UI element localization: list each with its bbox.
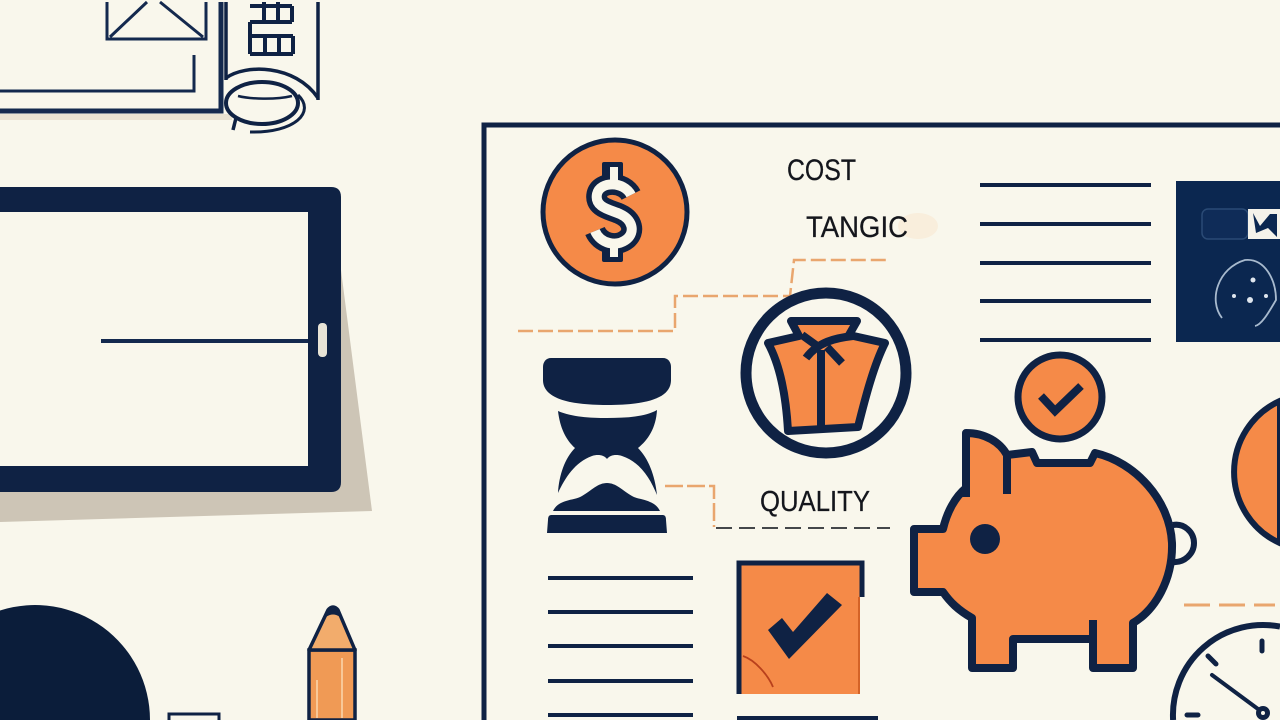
text lines, lower left: [548, 578, 693, 715]
small box, bottom: [169, 714, 219, 720]
heading: QUALITY: QUALITY: [760, 486, 870, 518]
icon: hourglass: [543, 358, 671, 533]
icon: envelope: [107, 2, 206, 39]
connector: dashed lines: [518, 260, 1275, 605]
icon: dollar coin: [543, 140, 687, 284]
heading: COST: COST: [787, 154, 856, 187]
pig eye: [970, 524, 1000, 554]
icon: pencil: [309, 607, 355, 720]
dark image tile: [1176, 181, 1280, 342]
text lines, upper right: [980, 185, 1151, 340]
faint glow behind label: [898, 213, 938, 239]
icon: check coin: [1018, 355, 1102, 439]
icon: clock: [1173, 625, 1280, 720]
icon: piggy bank: [914, 433, 1194, 668]
main panel frame: [484, 125, 1280, 720]
icon: orange circle, right edge: [1234, 401, 1280, 543]
pig tail: [1173, 525, 1194, 562]
label: garbled word: TANGIC: [806, 211, 908, 244]
dark circle, bottom left: [0, 605, 150, 720]
pig body: [914, 433, 1172, 668]
document sheet, top left: [0, 2, 232, 120]
tablet device: [0, 187, 372, 522]
icon: garment in circle: [746, 293, 906, 453]
icon: orange checkbox: [737, 563, 878, 720]
icon: rolled scroll: [226, 2, 318, 132]
